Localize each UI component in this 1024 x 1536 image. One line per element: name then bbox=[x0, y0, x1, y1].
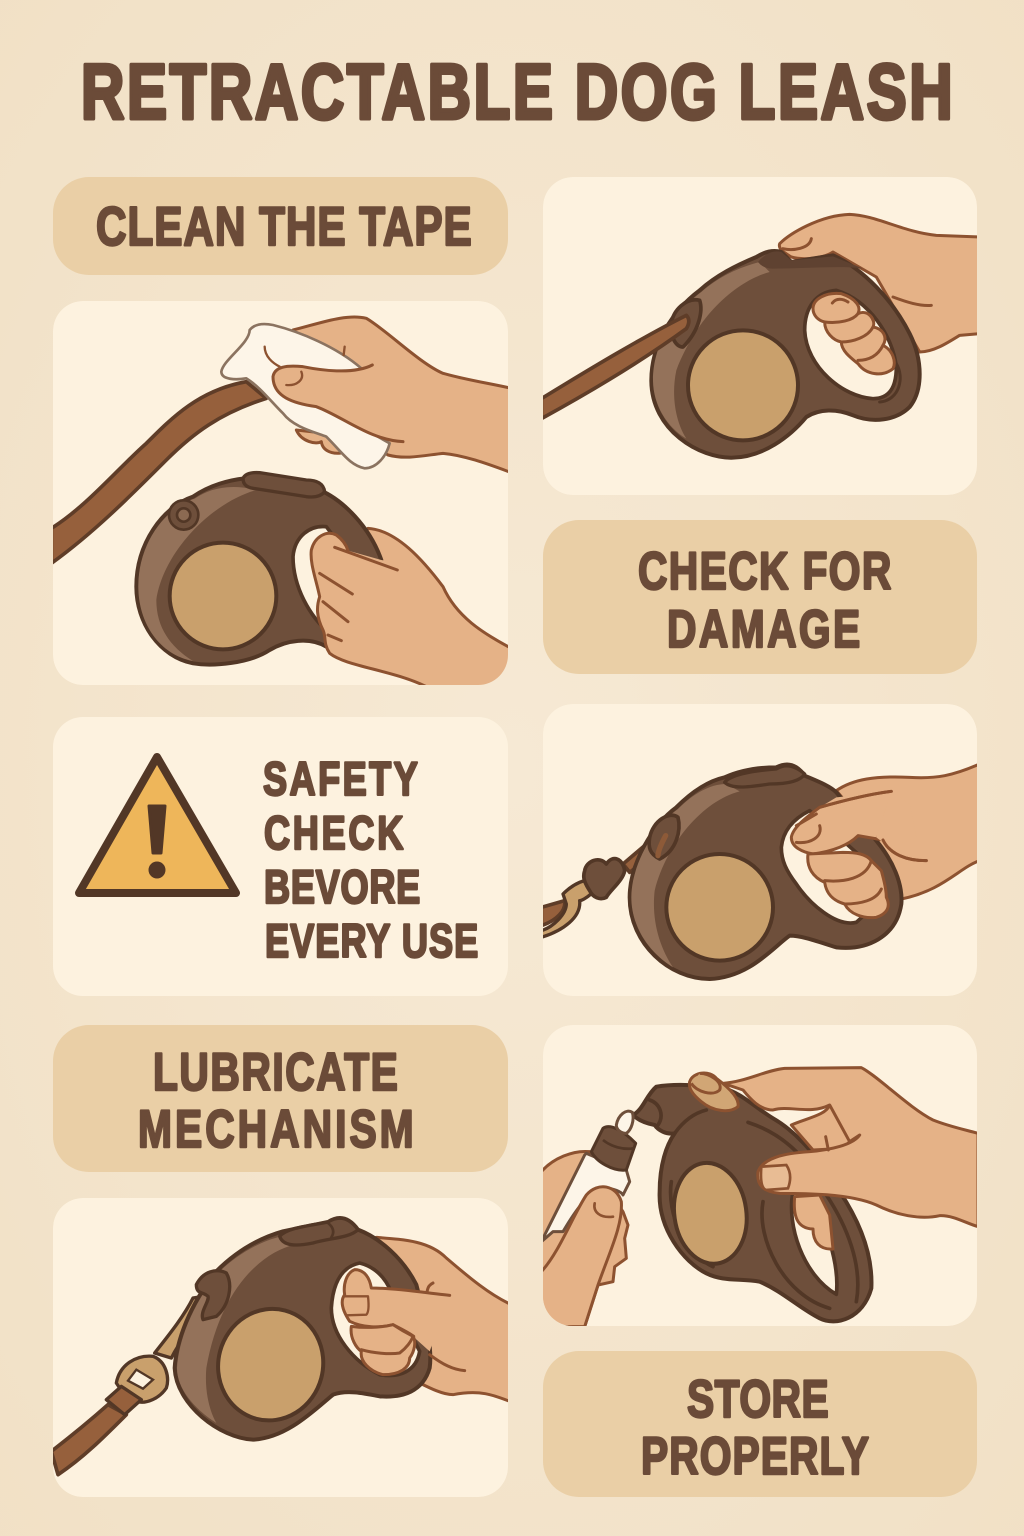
label: store properly bbox=[543, 1351, 977, 1497]
label: store properly: PROPERLY bbox=[641, 1427, 869, 1486]
icon: retractable leash handle bbox=[175, 1218, 430, 1440]
label: check for damage bbox=[543, 520, 977, 674]
label: check for damage: CHECK FOR bbox=[638, 542, 891, 601]
icon: retractable leash handle bbox=[651, 251, 920, 458]
label: lubricate mechanism: MECHANISM bbox=[138, 1100, 414, 1159]
leash with clasp bbox=[51, 1296, 206, 1475]
label: store properly: STORE bbox=[687, 1370, 829, 1429]
icon: back of lower hand bbox=[366, 526, 508, 685]
label: clean the tape bbox=[53, 177, 508, 275]
label: clean the tape: CLEAN THE TAPE bbox=[96, 197, 472, 257]
icon: retractable leash handle bbox=[630, 765, 902, 979]
icon: back of hand bbox=[836, 764, 980, 899]
icon: back of hand bbox=[779, 214, 980, 352]
panel: cleaning the tape illustration bbox=[51, 301, 511, 688]
icon: retractable leash handle bbox=[136, 473, 381, 665]
icon: right hand holding handle bbox=[689, 1068, 978, 1227]
safety text: SAFETY bbox=[263, 752, 418, 805]
label: lubricate mechanism: LUBRICATE bbox=[153, 1043, 398, 1102]
icon: upper hand with cloth bbox=[221, 317, 511, 473]
title: RETRACTABLE DOG LEASH bbox=[81, 48, 953, 135]
panel: check for damage illustration bbox=[541, 177, 980, 495]
safety text: BEVORE bbox=[264, 860, 420, 913]
icon: left hand with oil bottle bbox=[541, 1111, 636, 1327]
leash with clasp bbox=[543, 844, 643, 938]
safety text bbox=[263, 752, 478, 967]
icon: reel handle seen from side bbox=[633, 1085, 871, 1321]
label: lubricate mechanism bbox=[53, 1025, 508, 1172]
safety text: CHECK bbox=[264, 806, 403, 859]
icon: back of hand bbox=[376, 1237, 511, 1402]
icon: fingers in handle bbox=[783, 239, 931, 374]
panel: lubricate illustration bbox=[51, 1198, 511, 1497]
icon: fingers gripping handle bbox=[791, 791, 926, 918]
icon: fingers of lower hand bbox=[311, 533, 436, 688]
icon: warning triangle bbox=[79, 757, 236, 893]
panel: grip check illustration bbox=[541, 704, 980, 996]
safety text: EVERY USE bbox=[265, 914, 478, 967]
leash tape bbox=[541, 315, 689, 419]
panel: safety check bbox=[53, 717, 508, 996]
panel: store properly illustration bbox=[541, 1025, 978, 1327]
leash tape being wiped bbox=[51, 382, 266, 563]
icon: fingers gripping handle bbox=[342, 1270, 465, 1375]
label: check for damage: DAMAGE bbox=[667, 600, 860, 659]
